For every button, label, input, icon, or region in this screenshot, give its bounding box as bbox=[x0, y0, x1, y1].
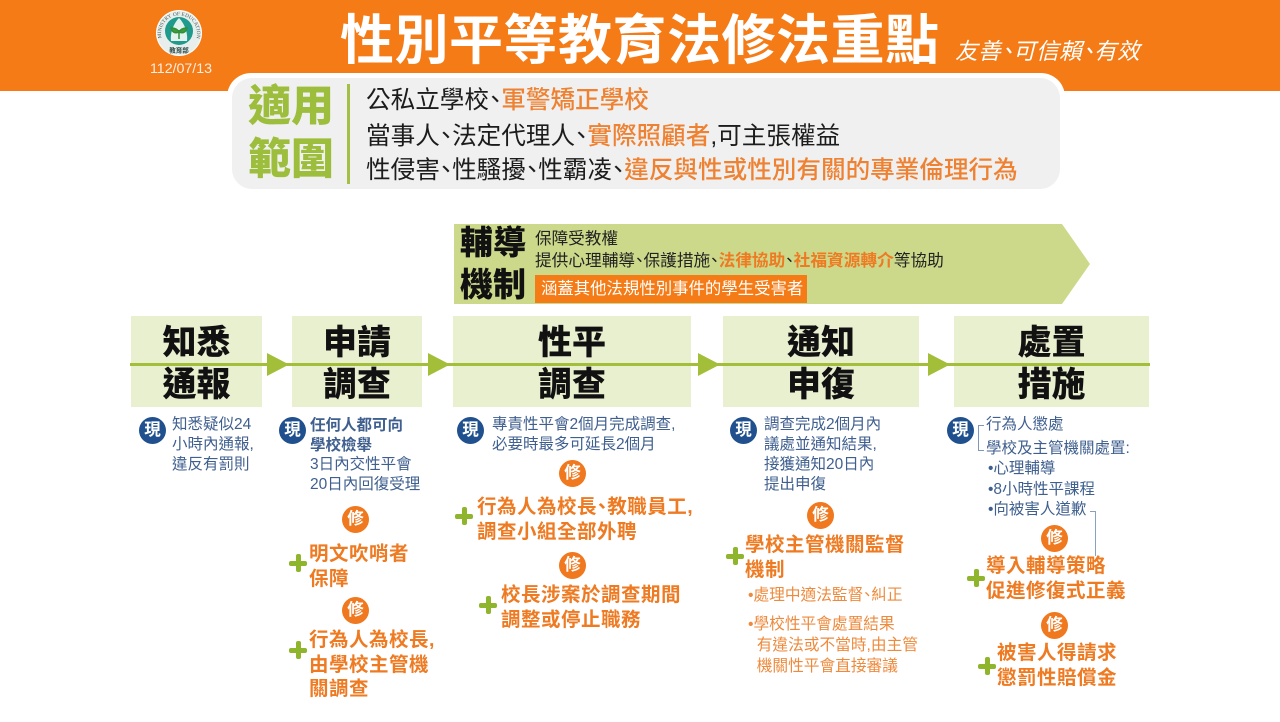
counselling highlight: 涵蓋其他法規性別事件的學生受害者 bbox=[541, 280, 803, 298]
current text: 專責性平會2個月完成調查, bbox=[492, 416, 675, 433]
step: 性平調查: 調查 bbox=[538, 366, 606, 404]
scope panel inner bbox=[232, 78, 1060, 189]
title: 性別平等教育法修法重點 bbox=[340, 11, 940, 71]
plus icon bbox=[455, 507, 473, 525]
amendment badge: 修 bbox=[564, 556, 581, 574]
amendment text: 機制 bbox=[745, 558, 785, 580]
scope line 1: 公私立學校、軍警矯正學校 bbox=[366, 87, 649, 114]
detail bullet 2: •學校性平會處置結果 bbox=[748, 616, 895, 633]
amendment badge bbox=[559, 552, 586, 579]
amendment badge bbox=[559, 460, 586, 487]
step: 通知申復: 通知 bbox=[787, 324, 855, 362]
amendment text: 導入輔導策略 bbox=[986, 555, 1106, 577]
amendment text bbox=[477, 496, 693, 542]
date: 112/07/13 bbox=[150, 61, 212, 77]
amendment text bbox=[309, 629, 435, 700]
plus icon bbox=[289, 554, 307, 572]
scope line 3: 性侵害、性騷擾、性霸凌、違反與性或性別有關的專業倫理行為 bbox=[366, 157, 1018, 184]
step: 申請調查: 申請 bbox=[323, 324, 391, 362]
current text bbox=[172, 416, 254, 473]
detail bullet 2 bbox=[748, 615, 918, 675]
amendment text: 保障 bbox=[309, 568, 349, 590]
current text bbox=[310, 456, 420, 493]
current bracket bbox=[978, 425, 984, 451]
process arrows line bbox=[130, 353, 1150, 376]
amendment text: 調整或停止職務 bbox=[501, 608, 641, 630]
current list bbox=[988, 460, 1095, 518]
header band bbox=[0, 0, 1280, 91]
subtitle: 友善、可信賴、有效 bbox=[955, 38, 1140, 64]
current badge bbox=[947, 417, 974, 444]
step: 處置措施: 措施 bbox=[1018, 366, 1086, 404]
column 3: 性平調查 bbox=[455, 416, 693, 630]
counselling heading: 輔導 bbox=[460, 224, 526, 261]
counselling heading bbox=[460, 224, 526, 303]
plus icon bbox=[479, 596, 497, 614]
column 1: 知悉通報 bbox=[139, 416, 254, 473]
current list: •8小時性平課程 bbox=[988, 480, 1095, 498]
amendment text bbox=[501, 584, 681, 630]
amendment text: 懲罰性賠償金 bbox=[997, 666, 1117, 688]
current badge bbox=[139, 417, 166, 444]
counselling line 2: 提供心理輔導、保護措施、法律協助、社福資源轉介等協助 bbox=[535, 251, 944, 270]
step: 知悉通報: 通報 bbox=[162, 366, 230, 404]
current badge bbox=[730, 417, 757, 444]
detail bullet 2: 機關性平會直接審議 bbox=[757, 658, 898, 675]
amendment badge: 修 bbox=[812, 506, 829, 524]
amendment text bbox=[745, 534, 905, 580]
plus icon bbox=[967, 569, 985, 587]
step: 處置措施 bbox=[954, 316, 1149, 407]
amendment text: 關調查 bbox=[309, 678, 369, 700]
column 4: 通知申復 bbox=[726, 416, 918, 675]
plus icon bbox=[289, 641, 307, 659]
amendment badge: 修 bbox=[347, 601, 364, 619]
current text: 20日內回復受理 bbox=[310, 476, 420, 493]
icon: ministry of education logo: 教育部 bbox=[169, 44, 189, 54]
amendment text: 促進修復式正義 bbox=[986, 580, 1126, 602]
amendment text: 調查小組全部外聘 bbox=[477, 520, 637, 542]
current list: •向被害人道歉 bbox=[988, 501, 1086, 518]
current badge: 現 bbox=[144, 421, 161, 439]
current text bbox=[764, 416, 881, 493]
amendment text bbox=[986, 555, 1126, 602]
amendment text: 由學校主管機 bbox=[309, 654, 429, 676]
icon: ministry of education logo: MINISTRY OF EDUCATION bbox=[158, 12, 200, 39]
amendment text: 行為人為校長, bbox=[309, 629, 435, 651]
current text bold: 任何人都可向 bbox=[310, 417, 403, 434]
counselling heading: 機制 bbox=[460, 266, 526, 303]
scope line 2: 當事人、法定代理人、實際照顧者,可主張權益 bbox=[366, 123, 840, 150]
amendment text bbox=[309, 543, 409, 590]
detail bullet 1: •處理中適法監督、糾正 bbox=[748, 587, 903, 604]
current text bold bbox=[310, 416, 403, 454]
current badge bbox=[457, 417, 484, 444]
current badge: 現 bbox=[462, 421, 479, 439]
amendment badge: 修 bbox=[347, 510, 364, 528]
amendment text: 校長涉案於調查期間 bbox=[501, 584, 681, 606]
current text: 知悉疑似24 bbox=[172, 416, 251, 433]
current badge: 現 bbox=[952, 421, 969, 439]
amendment badge bbox=[1041, 525, 1068, 552]
current text: 接獲通知20日內 bbox=[764, 456, 874, 473]
scope divider bbox=[347, 84, 350, 184]
current text: 必要時最多可延長2個月 bbox=[492, 436, 656, 453]
scope heading: 適用 bbox=[248, 83, 334, 131]
column 2: 申請調查 bbox=[279, 416, 435, 700]
plus icon bbox=[726, 547, 744, 565]
counselling highlight bbox=[535, 275, 807, 303]
current badge bbox=[279, 417, 306, 444]
current text: 違反有罰則 bbox=[172, 456, 250, 473]
amendment badge bbox=[807, 502, 834, 529]
amendment text: 學校主管機關監督 bbox=[745, 534, 905, 556]
current text: 提出申復 bbox=[764, 476, 826, 493]
arrow banner: counselling bbox=[454, 224, 1090, 304]
current text: 行為人懲處 bbox=[986, 416, 1064, 433]
current badge: 現 bbox=[284, 421, 301, 439]
step: 處置措施: 處置 bbox=[1018, 324, 1086, 362]
step: 知悉通報 bbox=[131, 316, 262, 407]
icon: ministry of education logo bbox=[156, 10, 202, 56]
step: 性平調查 bbox=[453, 316, 691, 407]
current text: 3日內交性平會 bbox=[310, 456, 412, 473]
current text: 學校及主管機關處置: bbox=[986, 440, 1130, 457]
step: 通知申復 bbox=[723, 316, 919, 407]
current text: 議處並通知結果, bbox=[764, 436, 877, 453]
amendment text: 行為人為校長、教職員工, bbox=[477, 496, 693, 518]
step: 通知申復: 申復 bbox=[787, 366, 855, 404]
step: 申請調查 bbox=[292, 316, 422, 407]
amendment badge: 修 bbox=[564, 464, 581, 482]
current badge: 現 bbox=[735, 421, 752, 439]
current text bbox=[492, 416, 675, 453]
detail bullet 2: 有違法或不當時,由主管 bbox=[757, 637, 918, 654]
current list: •心理輔導 bbox=[988, 460, 1055, 477]
current text bold: 學校檢舉 bbox=[310, 437, 372, 454]
amendment badge bbox=[342, 597, 369, 624]
panel: scope bbox=[227, 73, 1065, 191]
amendment text bbox=[997, 642, 1117, 688]
scope heading: 範圍 bbox=[248, 136, 334, 184]
amendment badge bbox=[342, 506, 369, 533]
counselling line 1: 保障受教權 bbox=[535, 229, 618, 248]
step: 申請調查: 調查 bbox=[323, 366, 391, 404]
current text: 調查完成2個月內 bbox=[764, 416, 881, 433]
amendment badge: 修 bbox=[1046, 616, 1063, 634]
step: 知悉通報: 知悉 bbox=[162, 324, 230, 362]
amendment text: 明文吹哨者 bbox=[309, 543, 409, 565]
amendment badge bbox=[1041, 612, 1068, 639]
amendment badge: 修 bbox=[1046, 529, 1063, 547]
plus icon bbox=[978, 657, 996, 675]
current text: 小時內通報, bbox=[172, 436, 254, 453]
connector line bbox=[1090, 511, 1096, 556]
step: 性平調查: 性平 bbox=[538, 324, 606, 362]
column 5: 處置措施 bbox=[947, 416, 1130, 688]
amendment text: 被害人得請求 bbox=[997, 642, 1117, 664]
scope heading bbox=[248, 83, 334, 184]
